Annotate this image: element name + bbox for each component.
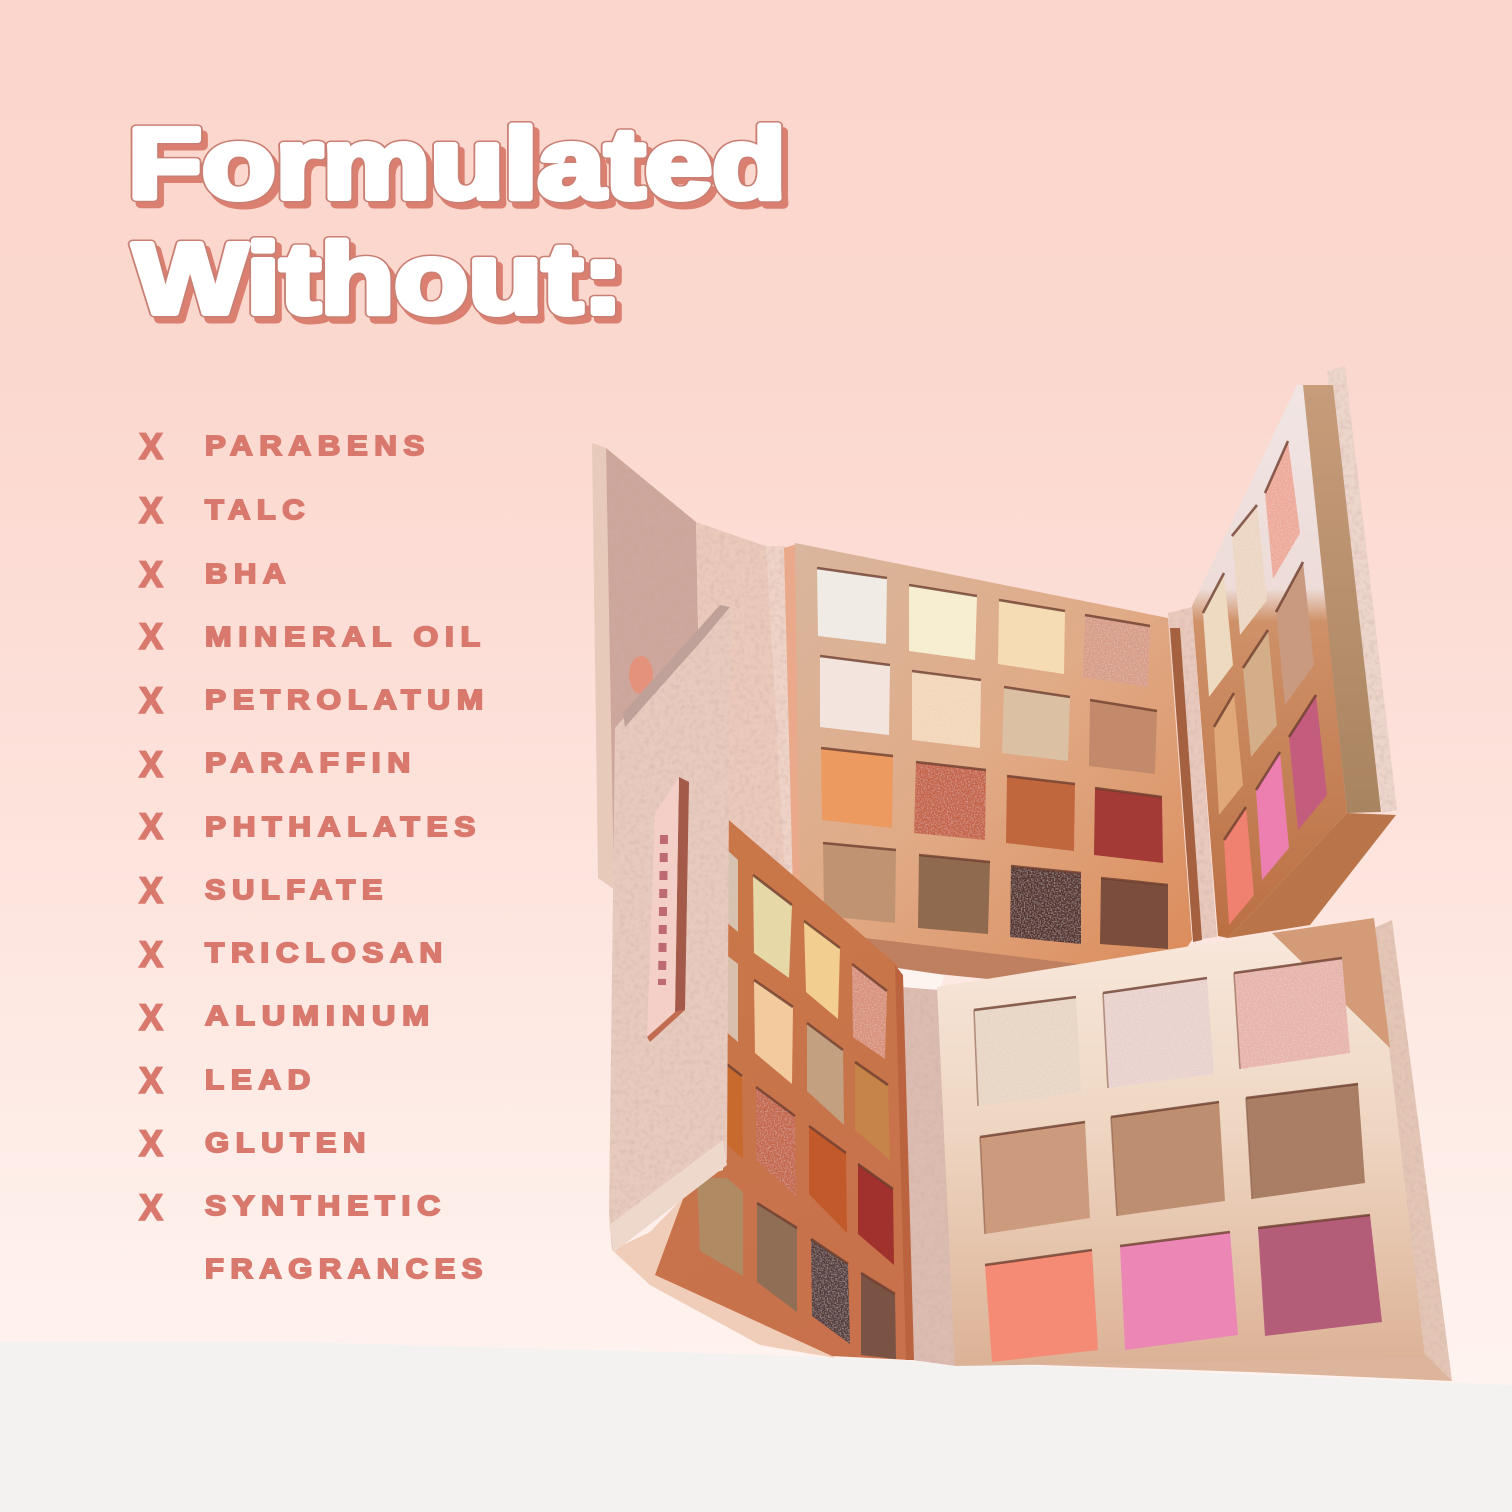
tray: [937, 918, 1425, 1366]
item: bha: BHA: [205, 558, 292, 589]
item: triclosan: [139, 934, 449, 975]
decorative pan rims: [817, 568, 1168, 885]
item: sulfate: SULFATE: [205, 874, 389, 905]
item: talc: [139, 490, 311, 531]
decorative pan rims: [974, 958, 1370, 1265]
hinge: [901, 987, 956, 1366]
tray base: [612, 1180, 835, 1358]
item: petrolatum: X: [139, 680, 163, 721]
tray base edge: [952, 1352, 1452, 1381]
leather edge strip: [1327, 366, 1397, 813]
item: parabens: PARABENS: [205, 430, 431, 461]
item: aluminum: X: [139, 997, 163, 1038]
title: Formulated Without: Formulated: [133, 114, 791, 226]
item: lead: X: [139, 1060, 163, 1101]
item: triclosan: X: [139, 934, 163, 975]
tray: [655, 815, 910, 1360]
back leather flap: [592, 443, 806, 935]
item: mineral oil: [139, 616, 487, 657]
title: Formulated Without: Formulated: [128, 108, 786, 220]
decorative pan rims: [1203, 441, 1316, 840]
title: Formulated Without: Without:: [138, 229, 628, 341]
decorative pan rims: [724, 875, 895, 1294]
item: paraffin: PARAFFIN: [205, 747, 417, 778]
palette: upper open 16-pan palette with side panel: [592, 366, 1397, 990]
item: gluten: [139, 1123, 372, 1164]
main tray: [795, 543, 1192, 975]
item: paraffin: [139, 744, 417, 785]
brand plate: [647, 777, 689, 1042]
item: phthalates: X: [139, 806, 163, 847]
item: talc: TALC: [205, 494, 311, 525]
item: petrolatum: PETROLATUM: [205, 684, 490, 715]
front leather flap: [609, 604, 730, 1250]
side panel tray: [1192, 385, 1396, 938]
main tray pans: [817, 568, 1168, 949]
item: mineral oil: X: [139, 616, 163, 657]
item: aluminum: [139, 997, 436, 1038]
pans: [697, 847, 896, 1359]
item: synthetic fragrances: [139, 1187, 489, 1284]
item: synthetic fragrances: FRAGRANCES: [205, 1253, 489, 1284]
top right shadow: [1272, 918, 1390, 1048]
icon: snap button: [629, 656, 653, 694]
decorative pan side rims: [974, 973, 1252, 1234]
item: gluten: GLUTEN: [205, 1127, 372, 1158]
item: synthetic fragrances: SYNTHETIC: [205, 1190, 447, 1221]
pans: [974, 958, 1382, 1362]
gap highlight: [897, 968, 945, 995]
item: aluminum: ALUMINUM: [205, 1000, 436, 1031]
main tray underside: [800, 930, 1100, 990]
item: parabens: [139, 426, 431, 467]
item: bha: X: [139, 554, 163, 595]
title: Formulated Without: Without:: [133, 223, 623, 335]
item: phthalates: [139, 806, 482, 847]
item: sulfate: X: [139, 870, 163, 911]
item: bha: [139, 554, 292, 595]
outer leather edge: [1374, 920, 1452, 1381]
item: sulfate: [139, 870, 389, 911]
item: paraffin: X: [139, 744, 163, 785]
item: parabens: X: [139, 426, 163, 467]
side hinge: [1168, 607, 1217, 942]
flap top stitched band: [623, 605, 730, 727]
palette: front tilted 16-pan palette with flap: [609, 604, 914, 1360]
item: talc: X: [139, 490, 163, 531]
title: Formulated Without: [128, 108, 791, 341]
palette: lower 9-pan face palette: [897, 918, 1452, 1381]
item: petrolatum: [139, 680, 490, 721]
flap bottom edge: [609, 1140, 727, 1252]
item: phthalates: PHTHALATES: [205, 811, 482, 842]
ingredient list: [139, 426, 490, 1284]
title: Formulated Without: Formulated: [128, 108, 786, 220]
tray right rim: [895, 965, 914, 1360]
item: gluten: X: [139, 1123, 163, 1164]
item: mineral oil: MINERAL OIL: [205, 621, 487, 652]
title: Formulated Without: Without:: [133, 223, 623, 335]
floor surface: [0, 1342, 1512, 1512]
plate ornament: [662, 835, 664, 985]
item: lead: LEAD: [205, 1064, 317, 1095]
item: triclosan: TRICLOSAN: [205, 937, 449, 968]
item: synthetic fragrances: X: [139, 1187, 163, 1228]
side panel pans: [1203, 441, 1327, 925]
item: lead: [139, 1060, 317, 1101]
